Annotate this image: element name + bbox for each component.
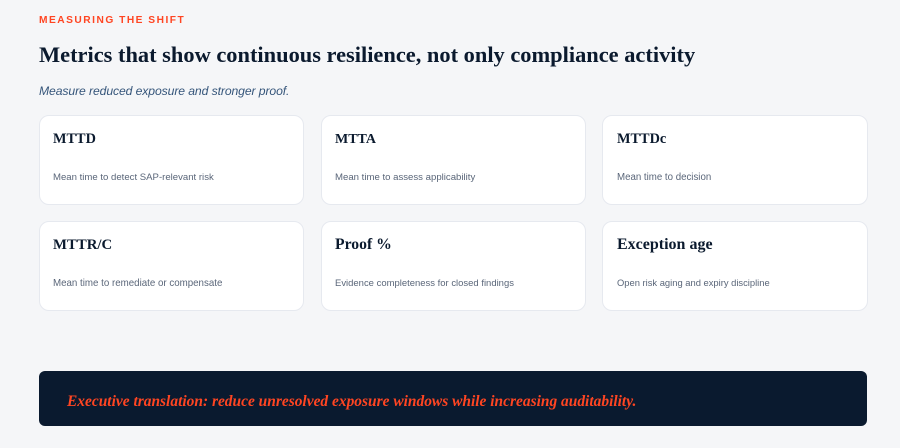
title: Metrics that show continuous resilience, not only compliance activity bbox=[39, 42, 695, 67]
card heading: Proof % bbox=[335, 236, 392, 253]
card: MTTDc bbox=[602, 115, 868, 205]
card heading: MTTD bbox=[53, 131, 96, 147]
subtitle: Measure reduced exposure and stronger proof. bbox=[39, 84, 289, 98]
card: Proof % bbox=[321, 221, 586, 311]
card description: Open risk aging and expiry discipline bbox=[617, 277, 770, 288]
card description: Mean time to decision bbox=[617, 172, 711, 183]
card description: Evidence completeness for closed findings bbox=[335, 278, 514, 289]
card heading: MTTR/C bbox=[53, 237, 112, 253]
banner text: Executive translation: reduce unresolved exposure windows while increasing auditability. bbox=[67, 393, 636, 410]
card: MTTA bbox=[321, 115, 586, 205]
card description: Mean time to detect SAP-relevant risk bbox=[53, 172, 214, 183]
card description: Mean time to remediate or compensate bbox=[53, 278, 222, 289]
card description: Mean time to assess applicability bbox=[335, 172, 475, 183]
card heading: MTTDc bbox=[617, 131, 666, 147]
card heading: MTTA bbox=[335, 132, 376, 147]
eyebrow label: MEASURING THE SHIFT bbox=[39, 15, 185, 26]
card heading: Exception age bbox=[617, 236, 713, 253]
card: MTTR/C bbox=[39, 221, 304, 311]
card: Exception age bbox=[602, 221, 868, 311]
executive translation banner bbox=[39, 371, 867, 426]
card: MTTD bbox=[39, 115, 304, 205]
